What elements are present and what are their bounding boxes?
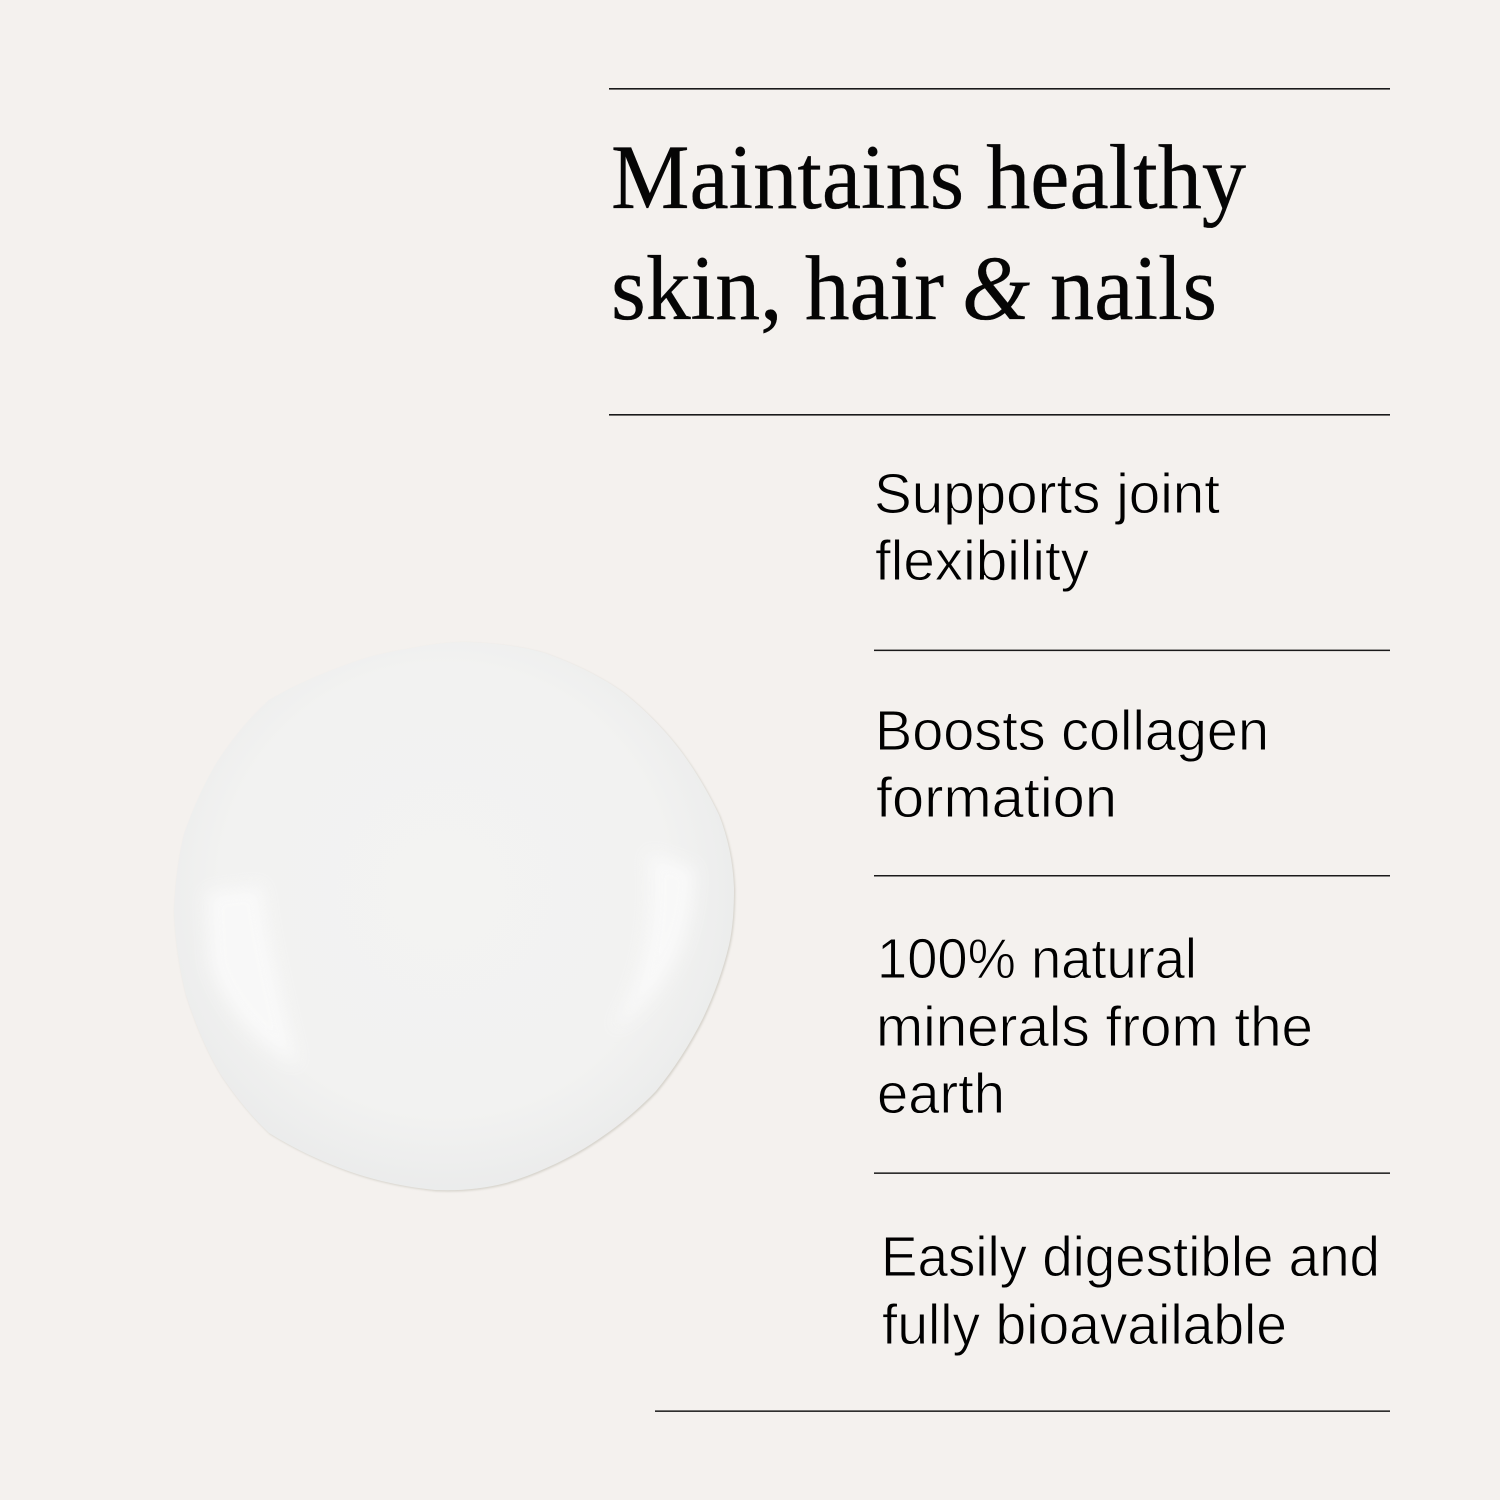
benefit: natural minerals: earth [877,1062,1005,1126]
benefit: digestible and bioavailable: Easily digestible and [881,1225,1380,1289]
heading text [611,126,1246,339]
benefit: natural minerals: minerals from the [876,995,1313,1059]
benefit: natural minerals: 100% natural [877,927,1197,991]
benefit: joint flexibility [874,462,1390,651]
heading text: & [962,237,1030,339]
highlight: left reflection [206,885,298,1065]
highlight: right reflection [612,852,695,1030]
benefit: natural minerals [874,927,1390,1174]
benefit: collagen formation: Boosts collagen [875,699,1269,763]
divider: above heading [609,88,1390,90]
heading block [609,88,1390,416]
benefit: digestible and bioavailable: fully bioavailable [882,1293,1287,1357]
heading text: Maintains healthy [611,126,1246,228]
benefit: digestible and bioavailable [655,1225,1390,1412]
heading text: nails [1050,237,1217,339]
illustration: white mineral droplet [174,642,735,1191]
benefit: collagen formation: formation [876,766,1117,830]
heading text: skin, hair [611,237,944,339]
benefit: joint flexibility: Supports joint [874,462,1220,526]
benefit: joint flexibility: flexibility [875,529,1089,593]
benefit: collagen formation [874,699,1390,876]
divider: below heading [609,414,1390,416]
